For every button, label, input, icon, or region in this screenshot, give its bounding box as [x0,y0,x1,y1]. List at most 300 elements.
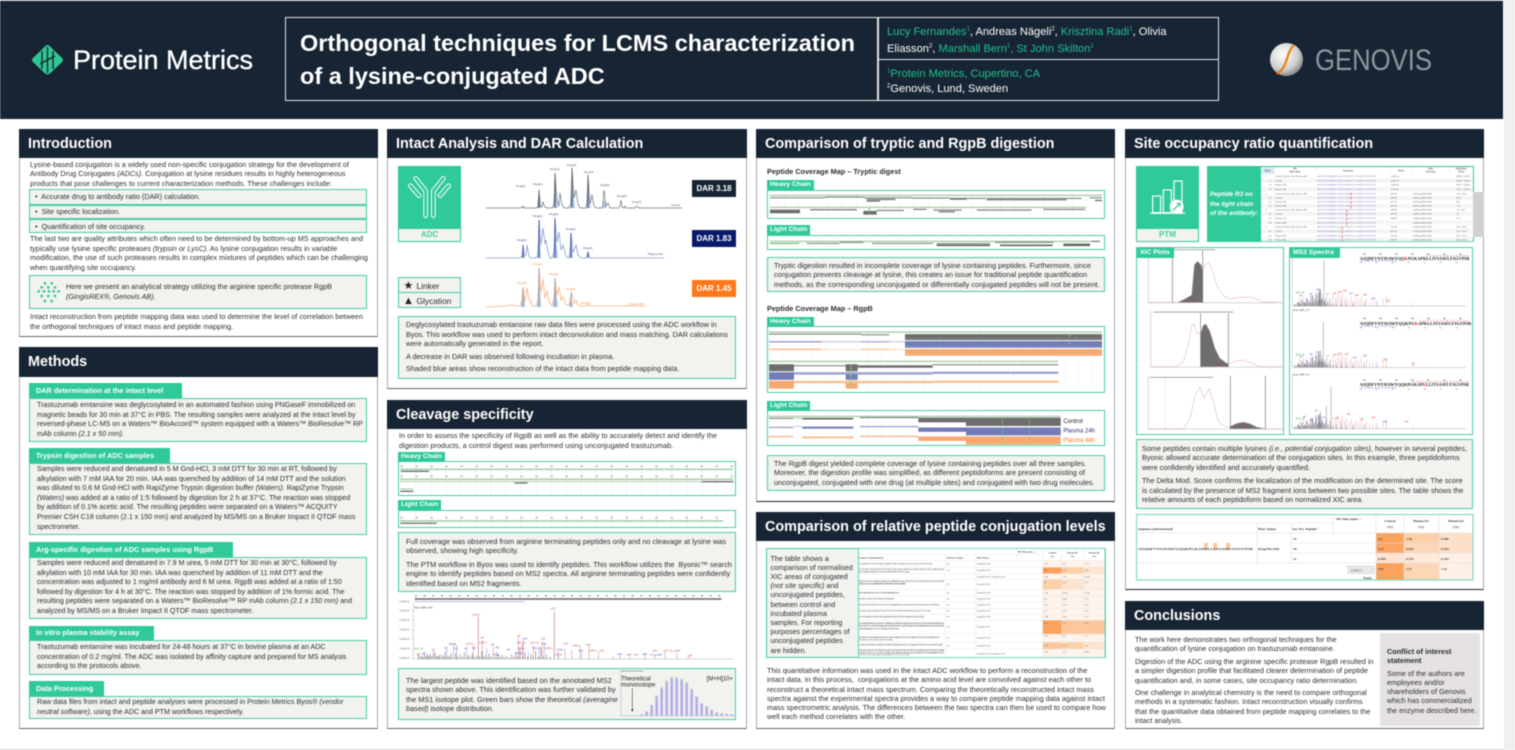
MS2 spectrum 1: M+H_16 [1295,292,1305,294]
table: conjugation levels: 27.4 [1062,644,1067,647]
table: peptidoform amounts: Totals [1363,576,1372,580]
text: reconstruction paragraph: spectra against the experimental spectra provides a way to compare peptide mapping data against intact [767,694,1105,703]
text: cleavage intro: digestion products, a control digest was performed using unconjugated trastuzumab. [399,441,673,450]
table: peptidoform list: 1.01 [1456,206,1461,208]
tab: light chain: Light Chain [401,501,438,508]
table: conjugation levels: MS Alias name — [1018,550,1036,553]
text box: table explanation: unconjugated peptides [770,636,843,645]
table: peptidoform list: 2.3 [1269,206,1272,208]
table: peptidoform list: 715.85 [1390,235,1398,237]
chart: MS1 isotope plot: [M+H]10+ [707,677,734,683]
table: conjugation levels: SGTASVVCLLNNFYPREAKVQWKVDNALQSGNSQESVTEQDSKDSTYSLSSTLTLSK [859,625,944,628]
heading: conjugation levels [756,512,1115,541]
icon: ADC antibody card: ADC [421,230,438,239]
chart: annotated MS2 spectrum: y37_3+_ma3 [663,649,680,653]
table: peptidoform list: 1.01 - 89.1 [1456,193,1467,195]
panel: conclusions [1124,600,1485,730]
text box: isotope validation: the MS1 isotope plot. Green bars show the theoretical (averagine [406,695,618,704]
chart: MS1 isotope plot [620,670,734,716]
table: conjugation levels: 1.32 [1084,563,1089,566]
control trace [486,163,682,208]
MS2 spectrum 3: y15 [1359,419,1364,421]
table: peptidoform list: 53.8 [1456,198,1461,200]
chart: MS1 isotope plot: monoisotope [621,683,656,689]
text: conclusion 3: One challenge in analytical chemistry is the need to compare orthogonal [1135,688,1367,697]
table: conjugation levels: SSTLTLSKADYEKHKVYACEVTH [859,654,909,657]
table: conjugation levels: Plasma D1 [1067,552,1079,555]
text box: intact findings: Shaded blue areas show reconstruction of the intact data from peptide mapping data. [406,364,679,373]
MS2 spectrum 1: b3 [1299,295,1303,297]
table: peptidoform list: K21/Drug/956.3100 [1413,197,1433,200]
method: Arg-specific digestion: concentration was adjusted to 1 mg/ml antibody and 6 M urea. RgpB was added at a ratio of 1:50 [37,578,342,586]
table: conjugation levels: 3.96 [1044,616,1049,619]
plasma 48h trace: Drug(2) [549,272,559,276]
table: peptidoform list: 58.4 - 58.4 [1456,240,1467,242]
table: peptidoform amounts [1135,513,1474,582]
table: peptidoform list: ASQDFVNTAVAWYQQKPGKAPKLLIYSASFLYSGVPSR [1317,197,1376,200]
box: XIC plots [1136,247,1284,434]
method: Arg-specific digestion: followed by digestion for 4 h at 30°C. The reaction was stopped by addition of 1% formic acid. The [37,588,344,596]
title box: Orthogonal techniques for LCMS characterization [300,30,855,56]
chart: annotated MS2 spectrum: b11-18 [532,646,541,650]
method: DAR determination: reversed-phase LC-MS on a Waters™ BioAccord™ system equipped with a Waters™ BioResolve™ RP [37,420,363,428]
table: peptidoform list: 1 [1265,176,1267,178]
table: conjugation levels: 2.37 [1062,563,1067,566]
table: conjugation levels [858,547,1107,659]
MS2 spectrum 3: ASQDFVNTAVAWYQQKPGKAPKLLIYSASFLYSGVPSR [1359,382,1470,387]
table: peptidoform list: ASQDFVNTAVAWYQQKPGKAPKLLIYSASFLYSGVPSR [1317,217,1376,220]
MS2 spectrum 1: b20 [1371,298,1376,300]
MS2 spectrum 3: y24 [1334,418,1339,420]
table: peptidoform list: Control [1275,213,1282,216]
chart: annotated MS2 spectrum: 0.00E+00 [399,658,410,660]
heading: Conclusions: Conclusions [1134,608,1220,624]
method: Arg-specific digestion: Samples were reduced and denatured in 7.9 M urea, 5 mM DTT for 30 min at 30°C, followed by [37,559,337,567]
table: peptidoform amounts: 0.554 [1441,547,1449,551]
table: peptidoform list: K21/Drug/956.3100 [1413,205,1433,208]
table: peptidoform list: MS [1293,169,1297,171]
tab: tryptic heavy chain: Heavy Chain [770,181,811,188]
control trace: Drug(1) [533,182,543,186]
chart: annotated MS2 spectrum: 1.00E+03 [399,649,410,651]
text box: specificity findings: The PTM workflow in Byos was used to identify peptides. This workflow utilizes the Byonic™ search [406,560,732,568]
text box: specificity findings: observed, showing high specificity. [406,546,519,555]
box: MS2 spectra [1289,247,1473,434]
callout: peptide R3: of the antibody: [1210,210,1258,217]
chart: annotated MS2 spectrum: y26++ [517,646,526,650]
table: peptidoform list: ASQDFVNTAVAWYQQKPGKAPKLLIYSASFLYSGVPSR [1317,184,1376,187]
table: peptidoform list: 3 [1265,210,1267,212]
text: intro paragraph [30,160,350,188]
table: peptidoform list: 25.2 [1456,218,1461,220]
heading: Methods: Methods [28,354,87,370]
plasma 48h trace: Drug(3) [566,287,576,291]
method: trypsin digestion: spectrometer. [37,523,80,531]
text box: table explanation: purposes percentages of [770,627,850,636]
table: conjugation levels: AKQSLVKGFYPSDIAVEWESNGQPENNYKTTPPVLDSDGSFFLYSKLTVDK [859,649,944,652]
MS2 spectrum 2: y24 [1338,353,1342,355]
table: peptidoform list: 1.2 [1269,185,1272,187]
chart: annotated MS2 spectrum: 5.00E+03 [399,611,410,613]
table: conjugation levels: 9.11 [1084,581,1089,584]
tab: XIC Plots: XIC Plots [1140,249,1170,256]
text box: intact findings: Deglycosylated trastuzumab emtansine raw data files were processed using the ADC workflow in [406,320,717,329]
chart: annotated MS2 spectrum: a6 [491,643,495,647]
table: peptidoform list: 3.1 [1269,214,1272,216]
table: peptidoform list: 1.0 - 25.2 [1456,210,1466,212]
DAR 1.45 badge: DAR 1.45 [696,284,732,293]
chart: annotated MS2 spectrum: b10a [516,651,522,655]
chart: annotated MS2 spectrum: y12 [551,607,556,611]
MS2 spectrum 1: y24 [1338,291,1342,293]
table: conjugation levels: 31.9 [1044,644,1049,647]
heading: tryptic vs RgpB: Comparison of tryptic and RgpB digestion [765,136,1054,152]
tab: heavy chain [398,452,445,462]
table: conjugation levels: (%) [1070,555,1075,558]
text box: specificity findings [398,532,736,592]
box: conflict of interest: which has commercialized [1387,696,1472,705]
text: conclusion 1: quantification of lysine conjugation on trastuzumab emtansine. [1135,644,1335,653]
chart: annotated MS2 spectrum: b9 [507,647,510,651]
tab: RgpB light chain: Light Chain [770,402,807,409]
text: reconstruction paragraph: intact data. In this process, conjugations at the amino acid level are convolved against each other to [767,675,1091,684]
table: conjugation levels: APKLLIYSASFLYSGVPSR [859,638,893,641]
table: peptidoform amounts: 2.4 [1378,537,1383,541]
table: peptidoform list: Mod. [1428,169,1434,171]
table: peptidoform list: 3.3 [1269,222,1272,224]
table: conjugation levels: 1.41 [1084,610,1089,613]
callout: RgpB strategy [29,275,367,309]
table: peptidoform list: 1,189.00 [1390,176,1400,178]
method: data processing: Raw data files from intact and peptide analyses were processed in Protein Metrics Byos® (vendor [37,698,343,706]
chart: annotated MS2 spectrum: y9_3+ [555,653,563,657]
text: closing paragraph [30,312,364,332]
MS2 spectrum 1: y11 [1333,293,1337,295]
method: trypsin digestion: by addition of 0.1% acetic acid. The resulting peptides were separated on a Waters™ ACQUITY [37,503,337,511]
table: conjugation levels: 34.6 [1062,569,1067,572]
table: peptidoform list: K21/Drug/956.3100 [1413,192,1433,195]
panel: methods [18,346,379,730]
chart: annotated MS2 spectrum: y15 [599,648,604,652]
table: peptidoform list: 1.1 [1269,180,1272,182]
logo: Protein Metrics: Protein Metrics [73,45,253,75]
table: peptidoform list: 4.1 [1269,231,1272,233]
chart: annotated MS2 spectrum: b6 [472,646,476,650]
text: reconstruction paragraph: This quantitative information was used in the intact ADC workflow to perform a reconstruction of the [767,666,1087,675]
box: conflict of interest: Conflict of interest [1387,646,1451,656]
MS2 spectrum 3: y19 [1371,417,1375,419]
table: peptidoform list: 1.3 [1269,189,1272,191]
table: peptidoform list: 4.2 [1269,235,1272,237]
table: conjugation levels: Drug956.3100 [977,644,991,647]
text box: localization findings: were confidently identified and accurately quantified. [1142,463,1310,472]
callout: peptide R3: Peptide R3 on [1210,191,1253,198]
table: peptidoform list: Control [1275,179,1282,182]
table: peptidoform list: 676.23 [1390,240,1398,242]
table: conjugation levels: Drug956.3100 [977,591,991,594]
tab: MS2 Spectra [1290,248,1340,258]
MS2 spectrum 1: y19 [1363,294,1367,296]
table: peptidoform amounts: 0.932 [1406,547,1414,551]
method: data processing [28,680,368,720]
tab: light chain [398,500,441,510]
table: peptidoform list: ASQDFVNTAVAWYQQKPGKAPKLLIYSASFLYSGVPSR [1317,226,1376,229]
plasma 48h trace [486,262,646,307]
coverage map: light chain [398,510,736,528]
MS2 spectrum 2: b9 [1316,352,1319,354]
text box: table explanation: are hidden. [770,646,806,655]
text: intro paragraph: Antibody Drug Conjugates (ADCs). Conjugation at lysine residues results in highly heterogeneous [30,169,346,178]
text box: specificity findings: Full coverage was observed from arginine terminating peptides only and no cleavage at lysine was [406,536,726,546]
coverage map: tryptic light chain [767,235,1105,250]
coverage map: RgpB light chain [767,410,1105,446]
table: conjugation levels: 16.2 [1062,581,1067,584]
MS2 spectrum 1: b17 [1349,293,1353,295]
table: conjugation levels: 2.44 [1062,597,1067,600]
table: conjugation levels: STSGGTAALGCLVKDYFPEPVTVSWNSGALTSGVHTSK [859,582,906,585]
plasma 24h trace: Drug(2) [549,212,559,216]
box: conflict of interest: Some of the authors are [1387,668,1465,678]
table: peptidoform list: 2.2 [1269,202,1272,204]
table: conjugation levels: VSKAFPEFRSGTDFTLTISSLQPEDFATYYCQQHYTTPPTFGQGTKVEIK [859,644,943,647]
heading: Intact Analysis: Intact Analysis and DAR Calculation [396,136,643,152]
MS2 spectrum 1: y15 [1343,290,1347,292]
chart: annotated MS2 spectrum: y8 [481,636,484,640]
control trace: Drug(7) [632,200,642,204]
table: peptidoform list: 569.81 [1390,198,1398,200]
table: conjugation levels: No [947,644,950,647]
table: peptidoform list: 3.2 [1269,218,1272,220]
table: peptidoform list: 2 [1265,193,1267,195]
table: peptidoform amounts: 21 [1293,557,1297,561]
table: peptidoform list: ASQDFVNTAVAWYQQKPGKAPKLLIYSASFLYSGVPSR [1317,188,1376,191]
tab: XIC Plots [1137,248,1174,258]
chart: MS1 isotope plot: Theoretical [621,677,651,683]
plasma 48h trace: Drug(1) [533,262,543,266]
table: peptidoform amounts: 15 [1293,537,1297,541]
table: conjugation levels: 0.891 [1084,650,1090,653]
method: trypsin digestion: (Waters) was added at a ratio of 1:5 followed by digestion for 2 h at 37°C. The reaction was stopped [37,494,350,502]
table: conjugation levels: 4.11 [1062,635,1067,638]
tab: heavy chain: Heavy Chain [401,453,442,460]
method: trypsin digestion [28,447,368,536]
table: conjugation levels: SFNRGECDIQMTQSPSSLSASVGDRVTITCRASQDVNTAVAWYQQKPGK [859,636,939,639]
table: conjugation levels: 1.13 [1084,597,1089,600]
table: conjugation levels: Drug956.3100 [977,616,991,619]
table: conjugation levels: No [947,597,950,600]
table: peptidoform list: ASQDFVNTAVAWYQQKPGKAPKLLIYSASFLYSGVPSR [1317,230,1376,233]
chart: annotated MS2 spectrum: 4.00E+03 [399,620,410,622]
table: conjugation levels: Drug956.3100 [977,637,991,640]
text: conclusion 2 [1134,657,1374,686]
table: peptidoform amounts: (%) [1418,525,1424,529]
table: peptidoform list: Plasma 24h [1275,218,1287,220]
plasma 48h trace: Drug(4) [581,301,591,305]
method: Arg-specific digestion: analyzed by MS/MS on a Bruker Impact II QTOF mass spectrometer. [37,607,253,615]
table: conjugation levels: Yes [947,637,950,640]
authors box [878,17,1219,60]
text box: isotope validation: The largest peptide was identified based on the annotated MS2 [406,676,612,684]
heading: Cleavage specificity [387,400,747,429]
method: Arg-specific digestion [28,541,368,620]
table: peptidoform list: K21/Drug/956.3100 [1413,201,1433,204]
MS2 spectrum 3: y21 [1404,421,1409,423]
table: peptidoform list: Control [1275,197,1282,200]
panel: site occupancy ratio quantification [1124,128,1485,591]
table: peptidoform amounts: Sequence (unformatted) [1138,527,1173,531]
MS2 spectrum 2: y11 [1333,354,1337,356]
table: conjugation levels: Drug956.3100, Drug956.3100 [977,653,1006,656]
table: peptidoform list: ASQDFVNTAVAWYQQKPGKAPKLLIYSASFLYSGVPSR [1317,179,1376,182]
table: conjugation levels: Plasma D2 [1089,552,1100,555]
table: peptidoform amounts: (%) [1453,525,1459,529]
text box: tryptic findings: Tryptic digestion resulted in incomplete coverage of lysine containing peptides. Furthermore, since [774,261,1091,270]
table: peptidoform list: ASQDFVNTAVAWYQQKPGKAPKLLIYSASFLYSGVPSR [1317,239,1376,242]
method: Arg-specific digestion: alkylation with 10 mM IAA for 30 min. IAA was quenched by addition of 11 mM DTT and the [37,569,323,577]
MS2 spectrum 1: b9 [1316,289,1319,291]
text box: table explanation: between control and [770,600,835,609]
table: peptidoform amounts: 2.37 [1406,567,1412,571]
table: peptidoform amounts: Mod. Names [1258,527,1277,531]
table: conjugation levels: (%) [1092,555,1096,558]
affiliations box [878,59,1219,101]
MS2 spectrum 2: y7 [1326,356,1329,358]
table: conjugation levels: No [947,591,950,594]
chart: annotated MS2 spectrum: y11 [541,637,546,641]
table: conjugation levels: 0.941 [1062,591,1068,594]
chart: annotated MS2 spectrum [399,594,734,660]
table: conjugation levels: (Glycan Group) ↑ [947,557,964,560]
table: peptidoform list: K18/Drug/956.3100 [1413,221,1433,224]
text box: isotope validation [398,668,736,720]
table: peptidoform amounts: 1.32 [1441,567,1447,571]
method: plasma stability [28,625,368,676]
method: plasma stability: according to the protocols above. [37,662,142,670]
MS2 spectrum 1: y18 [1354,295,1359,297]
scrollbar [1473,192,1484,237]
tab: tryptic heavy chain [767,180,814,190]
control trace: Drug(2) [550,167,560,171]
panel: intact analysis and DAR calculation [386,128,748,390]
table: peptidoform amounts: Control [1384,519,1396,523]
table: peptidoform list: Control [1275,230,1282,233]
chart: annotated MS2 spectrum: 2.00E+03 [399,639,410,641]
legend: linker and glycation: Glycation [416,296,451,306]
table: peptidoform list: Plasma 48h [1275,240,1287,242]
chart: annotated MS2 spectrum: y24 [688,653,693,657]
table: peptidoform list: ASQDFVNTAVAWYQQKPGKAPKLLIYSASFLYSGVPSR [1317,234,1376,237]
table: conjugation levels: DTLMISRTPEVTCVVVDVSHEDPEVK [859,592,899,594]
MS2 spectrum 2: Scan 2432, z=4 [1293,310,1310,312]
table: conjugation levels: 40.7 [1044,622,1049,625]
table: peptidoform list: 1.0 [1456,214,1460,216]
chart: annotated MS2 spectrum: b4 [444,646,448,650]
text box: RgpB findings: The RgpB digest yielded complete coverage of lysine containing peptides over all three samples. [774,459,1086,468]
table: conjugation levels: 13.7 [1084,644,1089,647]
table: peptidoform list: ASQDFVNTAVAWYQQKPGKAPKLLIYSASFLYSGVPSR [1317,201,1376,204]
subheading: tryptic map: Peptide Coverage Map – Tryptic digest [767,167,901,176]
method: data processing: Data Processing [36,684,93,693]
control trace: Control [671,203,680,207]
MS2 spectrum 3: Scan 2498, z=4 [1293,374,1310,376]
table: peptidoform amounts: 0.599 [1441,537,1449,541]
method: DAR determination [28,382,368,443]
MS2 spectrum 2: b17 [1353,357,1357,359]
plasma 24h trace [486,212,664,258]
table: conjugation levels: 3.04 [1062,616,1067,619]
table: peptidoform amounts: ASQDFVNTAVAWYQQKPGKAPKLLIYSASFLYSGVPSR [1138,547,1254,551]
text box: isotope validation: based) isotope distribution. [406,704,494,713]
text box: localization findings: The Delta Mod. Score confirms the localization of the modification on the determined site. The score [1142,476,1463,485]
text: second paragraph [29,234,368,272]
method: trypsin digestion: Trypsin digestion of ADC samples [36,451,154,460]
table: peptidoform list: 208.8 - 1036.3 [1456,176,1471,178]
coverage map: RgpB light chain: Plasma 48h [1063,438,1095,444]
table: peptidoform list: 487.10 [1390,202,1398,204]
chart: annotated MS2 spectrum: b13a [557,647,563,651]
table: peptidoform amounts: Drug/956.3100 [1258,547,1279,551]
table: conjugation levels: FNWYVDGVEVHNAKTKPR [859,597,895,600]
text box: specificity findings: engine to identify peptides based on MS2 spectra. All arginine terminating peptides were confidently [406,569,730,578]
text: reconstruction paragraph: reconstruct a theoretical intact mass spectrum. Comparing the theoretically reconstructed intact mass [767,684,1094,694]
table: conjugation levels: 0.541 [1084,591,1090,594]
heading: Methods [19,347,378,377]
chart: annotated MS2 spectrum: b11 [542,641,547,645]
table: peptidoform list: K15/Drug/956.3100 [1413,226,1433,229]
table: peptidoform list: 1,087.00 [1390,180,1400,182]
heading: site occupancy [1125,129,1484,158]
XIC trace 3 [1148,375,1283,429]
chart: annotated MS2 spectrum: y13++ [472,612,481,616]
tab: RgpB heavy chain [767,317,814,326]
table: peptidoform list: Plasma 24h [1275,185,1287,187]
table: conjugation levels: EEQYNSTYRVVSVLTVLHQDWLNGKEYKCKVSNKALPAPIEK [859,604,939,607]
table: peptidoform list: 342.34 [1390,206,1398,208]
method: DAR determination: Trastuzumab emtansine was deglycosylated in an automated fashion using PNGaseF immobilized on [37,401,355,409]
table: peptidoform list: Control, Plasma 24h, Plasma 48h [1275,175,1308,178]
MS2 spectrum 3: b7 [1323,417,1326,419]
MS2 spectrum 1: y21 [1386,300,1390,302]
title box: of a lysine-conjugated ADC [300,63,605,89]
table: peptidoform amounts: Var. Pos. Peptide ↑ [1292,527,1319,531]
text box: localization findings: is calculated by the presence of MS2 fragment ions between two possible sites. The table shows the [1142,486,1463,495]
table: peptidoform list: Plasma 48h [1275,222,1287,224]
table: peptidoform amounts: Level 1 [1351,568,1362,572]
DAR 3.18 badge [692,180,736,197]
table: peptidoform amounts: 1.16 [1406,537,1412,541]
tab: RgpB heavy chain: Heavy Chain [770,318,811,325]
text: intro paragraph: Lysine-based conjugation is a widely used non-specific conjugation strategy for the development of [30,160,349,168]
text box: localization findings [1136,439,1473,509]
challenge 3: • Quantification of site occupancy. [35,222,145,230]
table: peptidoform list: Score [1458,172,1465,174]
table: conjugation levels: No [947,569,950,572]
affiliations box: 2Genovis, Lund, Sweden [887,82,1008,94]
text: conclusion 3: methods in a systematic fashion. Intact reconstruction visually confirms [1135,697,1363,706]
method: trypsin digestion: Premier CSH C18 column (2.1 x 150 mm) and analyzed by MS/MS on a Bruker Impact II QTOF mass [37,513,355,521]
heading: Conclusions [1125,601,1484,630]
heading: Introduction [19,129,378,158]
coverage map: RgpB heavy chain [767,326,1105,392]
table: peptidoform amounts: 5.07 [1378,567,1384,571]
table: peptidoform list: K18/Drug/956.3100 [1413,209,1433,212]
MS2 spectrum 2: y21 [1411,363,1415,365]
panel: introduction [18,128,379,338]
table: peptidoform list: K15/Drug/956.3100 [1413,239,1433,242]
table: conjugation levels: FSGSRSGTDFTLTISSLQPEDFATYYCQQ [859,570,909,573]
chart: intact DAR spectra [486,164,682,308]
table: peptidoform list: ASQDFVNTAVAWYQQKPGKAPKLLIYSASFLYSGVPSR [1317,205,1376,208]
